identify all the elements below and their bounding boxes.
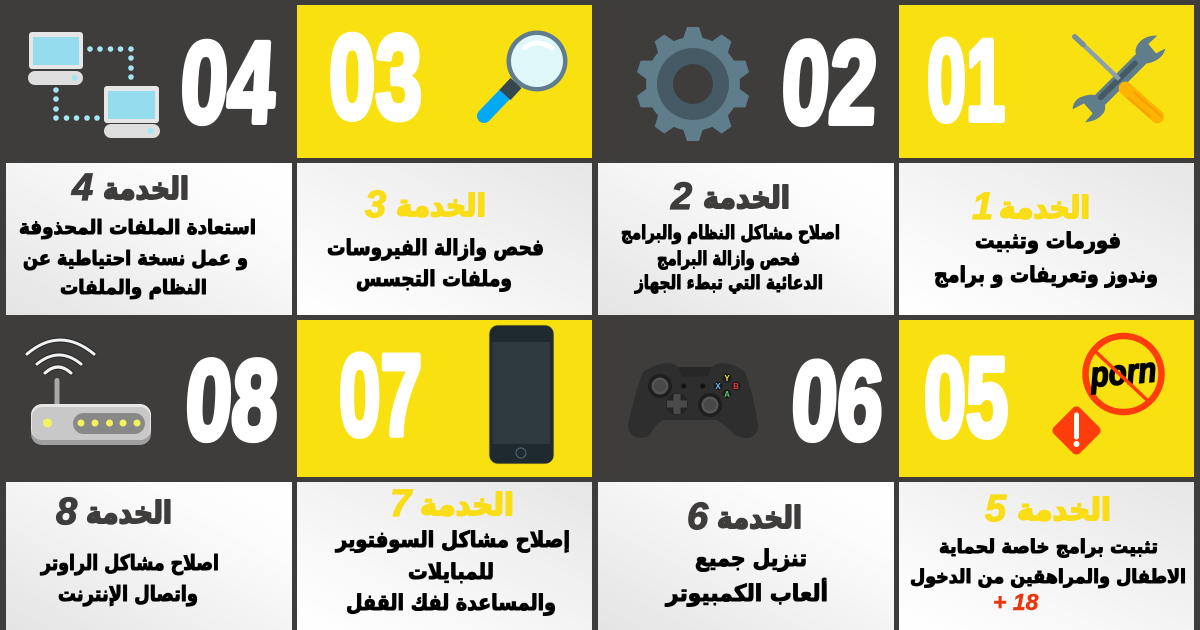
text: service 7 description: والمساعدة لفك القفل bbox=[346, 591, 556, 616]
heading: service 5: 5 bbox=[985, 488, 1007, 530]
icon: no adult content sign: porn bbox=[1088, 350, 1158, 395]
panel: service 8 card bbox=[6, 482, 292, 630]
icon: warning diamond bbox=[1050, 404, 1103, 457]
panel: service 3 card bbox=[297, 163, 592, 315]
heading: service 5: الخدمة bbox=[1017, 493, 1111, 528]
text: service 1 description: فورمات وتثبيت bbox=[975, 229, 1121, 254]
heading: service 6: الخدمة bbox=[717, 501, 802, 536]
icon: magnifying glass bbox=[484, 30, 568, 116]
heading: service 1: الخدمة bbox=[999, 191, 1090, 226]
text: service 6 description: ألعاب الكمبيوتر bbox=[665, 577, 828, 607]
icon: game controller: A bbox=[724, 390, 730, 399]
heading: service 4 bbox=[71, 167, 189, 209]
panel: service 4 card bbox=[6, 163, 292, 315]
heading: service 4: 4 bbox=[71, 167, 93, 209]
text: service 3 description bbox=[327, 236, 544, 292]
text: service 4 description: استعادة الملفات المحذوفة bbox=[19, 215, 256, 239]
heading: service 3: 3 bbox=[365, 184, 386, 226]
icon: no adult content sign bbox=[1086, 336, 1162, 412]
heading: service 1 bbox=[972, 186, 1090, 228]
number 02: 02 bbox=[779, 17, 881, 148]
text: service 5 description bbox=[910, 536, 1186, 588]
heading: service 8: الخدمة bbox=[86, 496, 172, 531]
text: service 2 description bbox=[621, 222, 840, 294]
icon: gear bbox=[636, 27, 750, 141]
heading: service 8: 8 bbox=[56, 491, 78, 533]
panel: service 05 tile bbox=[899, 320, 1194, 477]
icon: game controller bbox=[628, 363, 758, 438]
heading: service 7: الخدمة bbox=[420, 488, 514, 523]
text: service 3 description: فحص وازالة الفيروسات bbox=[327, 236, 544, 261]
text: service 4 description: النظام والملفات bbox=[60, 275, 207, 299]
icon: game controller: B bbox=[733, 382, 739, 391]
text: service 5 description: تثبيت برامج خاصة لحماية bbox=[939, 536, 1158, 558]
text: service 6 description bbox=[665, 546, 828, 607]
icon: smartphone bbox=[489, 325, 554, 464]
heading: service 2: الخدمة bbox=[703, 181, 790, 216]
text: 18 plus: + 18 bbox=[993, 589, 1039, 615]
heading: service 8 bbox=[56, 491, 172, 533]
icon: wrench and screwdriver bbox=[1073, 36, 1165, 122]
heading: service 7: 7 bbox=[390, 483, 413, 525]
panel: service 01 tile bbox=[899, 5, 1194, 158]
heading: service 6: 6 bbox=[687, 496, 709, 538]
number 08: 08 bbox=[183, 337, 281, 463]
heading: service 2 bbox=[670, 176, 790, 218]
number 03: 03 bbox=[329, 11, 422, 144]
panel: service 03 tile bbox=[297, 5, 592, 158]
heading: service 1: 1 bbox=[972, 186, 993, 228]
icon: networked computers bbox=[28, 32, 160, 138]
icon: wifi router bbox=[27, 340, 151, 445]
heading: service 5 bbox=[985, 488, 1111, 530]
number 01: 01 bbox=[927, 17, 1005, 145]
panel: service 2 card bbox=[598, 163, 894, 315]
heading: service 3: الخدمة bbox=[396, 189, 486, 224]
number 05: 05 bbox=[924, 335, 1008, 460]
number 04: 04 bbox=[178, 19, 278, 147]
text: service 7 description: للمبايلات bbox=[408, 560, 494, 585]
text: service 3 description: وملفات التجسس bbox=[356, 267, 512, 292]
text: service 2 description: اصلاح مشاكل النظام والبرامج bbox=[621, 222, 840, 244]
text: service 4 description bbox=[19, 215, 256, 299]
panel: service 5 card bbox=[899, 482, 1194, 630]
text: service 1 description: وندوز وتعريفات و برامج bbox=[934, 263, 1158, 288]
heading: service 3 bbox=[365, 184, 486, 226]
icon: game controller: X bbox=[715, 382, 721, 391]
text: service 6 description: تنزيل جميع bbox=[695, 546, 807, 572]
number 06: 06 bbox=[789, 338, 886, 463]
heading: service 6 bbox=[687, 496, 802, 538]
text: service 7 description: إصلاح مشاكل السوفتوير bbox=[335, 528, 570, 553]
text: service 1 description bbox=[934, 229, 1158, 288]
heading: service 4: الخدمة bbox=[103, 172, 189, 207]
text: service 8 description bbox=[40, 551, 219, 606]
text: service 8 description: اصلاح مشاكل الراوتر bbox=[40, 551, 219, 575]
panel: service 1 card bbox=[899, 163, 1194, 315]
text: service 4 description: و عمل نسخة احتياطية عن bbox=[23, 246, 248, 270]
heading: service 2: 2 bbox=[670, 176, 692, 218]
icon: game controller: Y bbox=[724, 374, 730, 383]
heading: service 7 bbox=[390, 483, 514, 525]
text: service 2 description: الدعائية التي تبطء الجهاز bbox=[634, 272, 823, 294]
number 07: 07 bbox=[339, 332, 422, 460]
text: service 8 description: واتصال الإنترنت bbox=[58, 582, 198, 606]
text: service 2 description: فحص وازالة البرامج bbox=[657, 248, 800, 270]
panel: service 7 card bbox=[297, 482, 592, 630]
text: service 7 description bbox=[335, 528, 570, 616]
panel: service 07 tile bbox=[297, 320, 592, 477]
panel: service 6 card bbox=[598, 482, 894, 630]
